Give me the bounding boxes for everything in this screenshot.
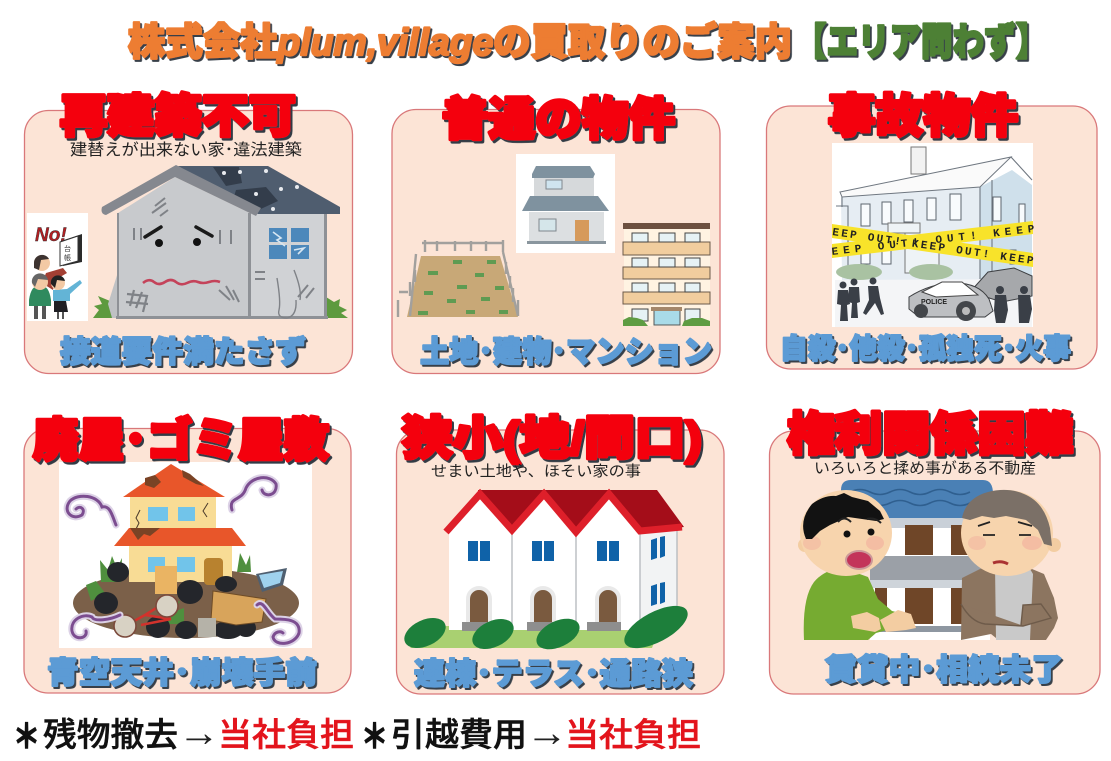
illustration: crime scene: EEP OUT! OUT! KEEP [831,224,1036,259]
panel: 狭小(地/間口) [396,412,724,694]
title: 【エリア問わず】 [795,22,1047,64]
illustration: crime scene: POLICE [921,299,947,306]
label: 接道要件満たさず: 接道要件満たさず [60,336,306,369]
text: 建替え: 建替えが出来ない家･違法建築 [70,141,302,159]
label: 青空天井･崩壊手前: 青空天井･崩壊手前 [47,657,317,690]
panel: 再建築不可 [24,90,352,374]
heading: 普通の物件: 普通の物件 [442,93,675,145]
footer note: 当社負担 [218,716,354,753]
panel: 事故物件 [766,90,1097,369]
icon: people pointing at ledger: 帳 [64,253,71,262]
label: 土地･建物･マンション: 土地･建物･マンション [420,336,712,369]
heading: 廃屋･ゴミ屋敷: 廃屋･ゴミ屋敷 [33,414,329,466]
footer note [13,711,701,755]
footer note: 残物撤去 [43,716,178,753]
illustration: crime scene [831,143,1036,327]
illustration: two men arguing [798,480,1061,640]
text: いろいろと揉め事: いろいろと揉め事がある不動産 [814,460,1036,477]
icon: people pointing at ledger [27,213,88,321]
icon: vacant land [398,240,518,317]
label: 自殺･他殺･孤独死･火事: 自殺･他殺･孤独死･火事 [780,333,1071,364]
icon: people pointing at ledger: No! [35,225,67,246]
heading: 再建築不可: 再建築不可 [60,90,296,142]
icon: detached house [516,154,615,253]
panel: 普通の物件 [392,93,720,374]
footer note: ＊ [13,718,40,755]
illustration: row houses [400,490,694,657]
icon: sad old house [93,165,348,319]
title: 株式会社plum,villageの買取りのご案内 [128,21,792,64]
text: せまい土地や: せまい土地や、ほそい家の事 [431,463,641,480]
panel: 廃屋･ゴミ屋敷 [24,414,351,693]
footer note: → [178,711,220,755]
heading: 狭小(地/間口): 狭小(地/間口) [402,412,702,464]
illustration: trash house [59,462,312,648]
footer note: 当社負担 [565,716,701,753]
icon: apartment building [623,223,710,326]
icon: people pointing at ledger: 台 [64,244,71,253]
panel: 権利関係困難 [770,408,1100,694]
heading: 権利関係困難: 権利関係困難 [787,408,1073,460]
label: 賃貸中･相続未了: 賃貸中･相続未了 [825,653,1063,687]
footer note: 引越費用 [391,716,527,753]
footer note: ＊ [361,718,388,755]
heading: 事故物件: 事故物件 [828,90,1018,142]
label: 連棟･テラス･通路狭: 連棟･テラス･通路狭 [414,658,693,691]
illustration: crime scene: EEP OUT! KEEP OUT! KEEP [831,227,1034,268]
footer note: → [526,711,568,755]
